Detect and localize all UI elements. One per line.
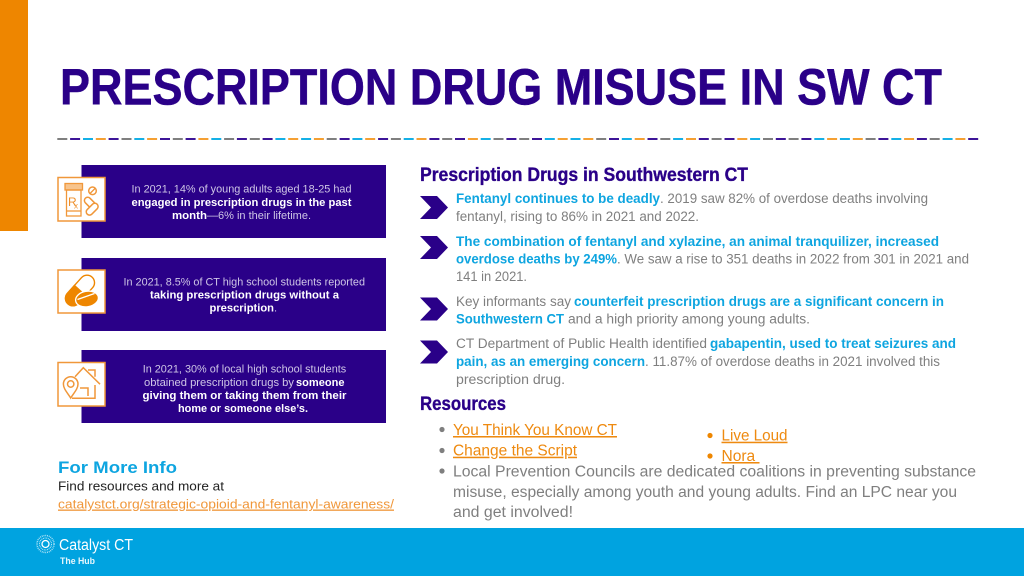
item: counterfeit drugs: counterfeit prescription drugs are a significant concern in bbox=[574, 294, 944, 309]
item: counterfeit drugs: Key informants say bbox=[456, 294, 571, 309]
list: resources left column: misuse, especially among youth and young adults. Find an LPC near you bbox=[453, 484, 957, 501]
list: resources left column: Change the Script bbox=[453, 443, 578, 460]
item: xylazine: overdose deaths by 249% bbox=[456, 252, 617, 266]
text: local students: obtained prescription drugs by bbox=[144, 377, 294, 389]
logo: Catalyst CT: Catalyst CT bbox=[59, 537, 133, 554]
text: local students: home or someone else’s. bbox=[178, 403, 308, 415]
panel: local students statistic bbox=[58, 350, 386, 423]
icon: prescription bottle and pills bbox=[58, 178, 105, 221]
arrow 3 bbox=[420, 298, 448, 320]
list: resources right column: Nora bbox=[722, 448, 760, 465]
icon: capsule and tablet bbox=[58, 270, 105, 313]
logo: Catalyst CT bbox=[37, 536, 133, 567]
list: resources right column bbox=[707, 428, 788, 465]
item: gabapentin: . 11.87% of overdose deaths in 2021 involved this bbox=[645, 354, 940, 369]
list: resources left column bbox=[439, 422, 976, 521]
list: resources right column: Live Loud bbox=[722, 428, 788, 445]
item: fentanyl: fentanyl, rising to 86% in 2021 and 2022. bbox=[456, 209, 699, 224]
text: high school students: prescription bbox=[210, 303, 274, 315]
list: resources left column: Local Prevention Councils are dedicated coalitions in preventing substance bbox=[453, 464, 976, 481]
icon: prescription bottle and pills: x bbox=[74, 202, 78, 210]
text: young adults: —6% in their lifetime. bbox=[207, 210, 311, 222]
item: counterfeit drugs: and a high priority among young adults. bbox=[568, 312, 810, 326]
item: gabapentin: gabapentin, used to treat seizures and bbox=[710, 336, 956, 351]
list: resources left column: You Think You Know CT bbox=[453, 422, 618, 439]
icon: map pin and house bbox=[58, 362, 105, 406]
item: xylazine: The combination of fentanyl and xylazine, an animal tranquilizer, increased bbox=[456, 234, 939, 249]
panel: high school students statistic bbox=[58, 258, 386, 331]
item: fentanyl: . 2019 saw 82% of overdose deaths involving bbox=[660, 191, 928, 206]
icon: prescription bottle and pills: R bbox=[68, 195, 77, 209]
for more info block: catalystct.org/strategic-opioid-and-fentanyl-awareness/ bbox=[58, 496, 394, 512]
panel: young adults statistic bbox=[58, 165, 386, 238]
text: young adults bbox=[132, 184, 352, 222]
item: xylazine: . We saw a rise to 351 deaths in 2022 from 301 in 2021 and bbox=[617, 252, 969, 266]
item: counterfeit drugs bbox=[420, 294, 944, 326]
text: local students bbox=[142, 364, 347, 415]
footer band bbox=[0, 528, 1024, 576]
for more info block bbox=[58, 458, 394, 512]
for more info block: Find resources and more at bbox=[58, 478, 224, 494]
item: counterfeit drugs: Southwestern CT bbox=[456, 312, 565, 326]
text: local students: In 2021, 30% of local high school students bbox=[143, 364, 347, 376]
item: fentanyl bbox=[420, 191, 928, 224]
arrow 2 bbox=[420, 236, 448, 259]
item: gabapentin: prescription drug. bbox=[456, 372, 565, 387]
item: xylazine: 141 in 2021. bbox=[456, 269, 527, 284]
heading: resources: Resources bbox=[420, 394, 506, 415]
text: young adults: In 2021, 14% of young adults aged 18-25 had bbox=[132, 184, 352, 196]
text: young adults: month bbox=[172, 210, 207, 222]
item: gabapentin bbox=[420, 336, 956, 387]
item: gabapentin: pain, as an emerging concern bbox=[456, 354, 645, 369]
text: local students: someone bbox=[296, 377, 344, 389]
for more info block: For More Info bbox=[58, 458, 177, 477]
heading: prescription drugs: Prescription Drugs in Southwestern CT bbox=[420, 165, 748, 186]
text: local students: giving them or taking them from their bbox=[142, 390, 347, 402]
item: gabapentin: CT Department of Public Health identified bbox=[456, 336, 707, 351]
logo: Catalyst CT: The Hub bbox=[60, 556, 95, 567]
arrow 1 bbox=[420, 196, 448, 219]
orange accent bar bbox=[0, 0, 28, 231]
text: young adults: engaged in prescription drugs in the past bbox=[132, 197, 352, 209]
arrow 4 bbox=[420, 340, 448, 364]
list: resources left column: and get involved! bbox=[453, 504, 573, 521]
text: high school students: In 2021, 8.5% of CT high school students reported bbox=[124, 276, 365, 288]
text: high school students bbox=[124, 276, 365, 315]
text: high school students: taking prescription drugs without a bbox=[150, 290, 340, 302]
item: xylazine bbox=[420, 234, 969, 284]
text: high school students: . bbox=[274, 303, 277, 315]
item: fentanyl: Fentanyl continues to be deadly bbox=[456, 191, 661, 206]
